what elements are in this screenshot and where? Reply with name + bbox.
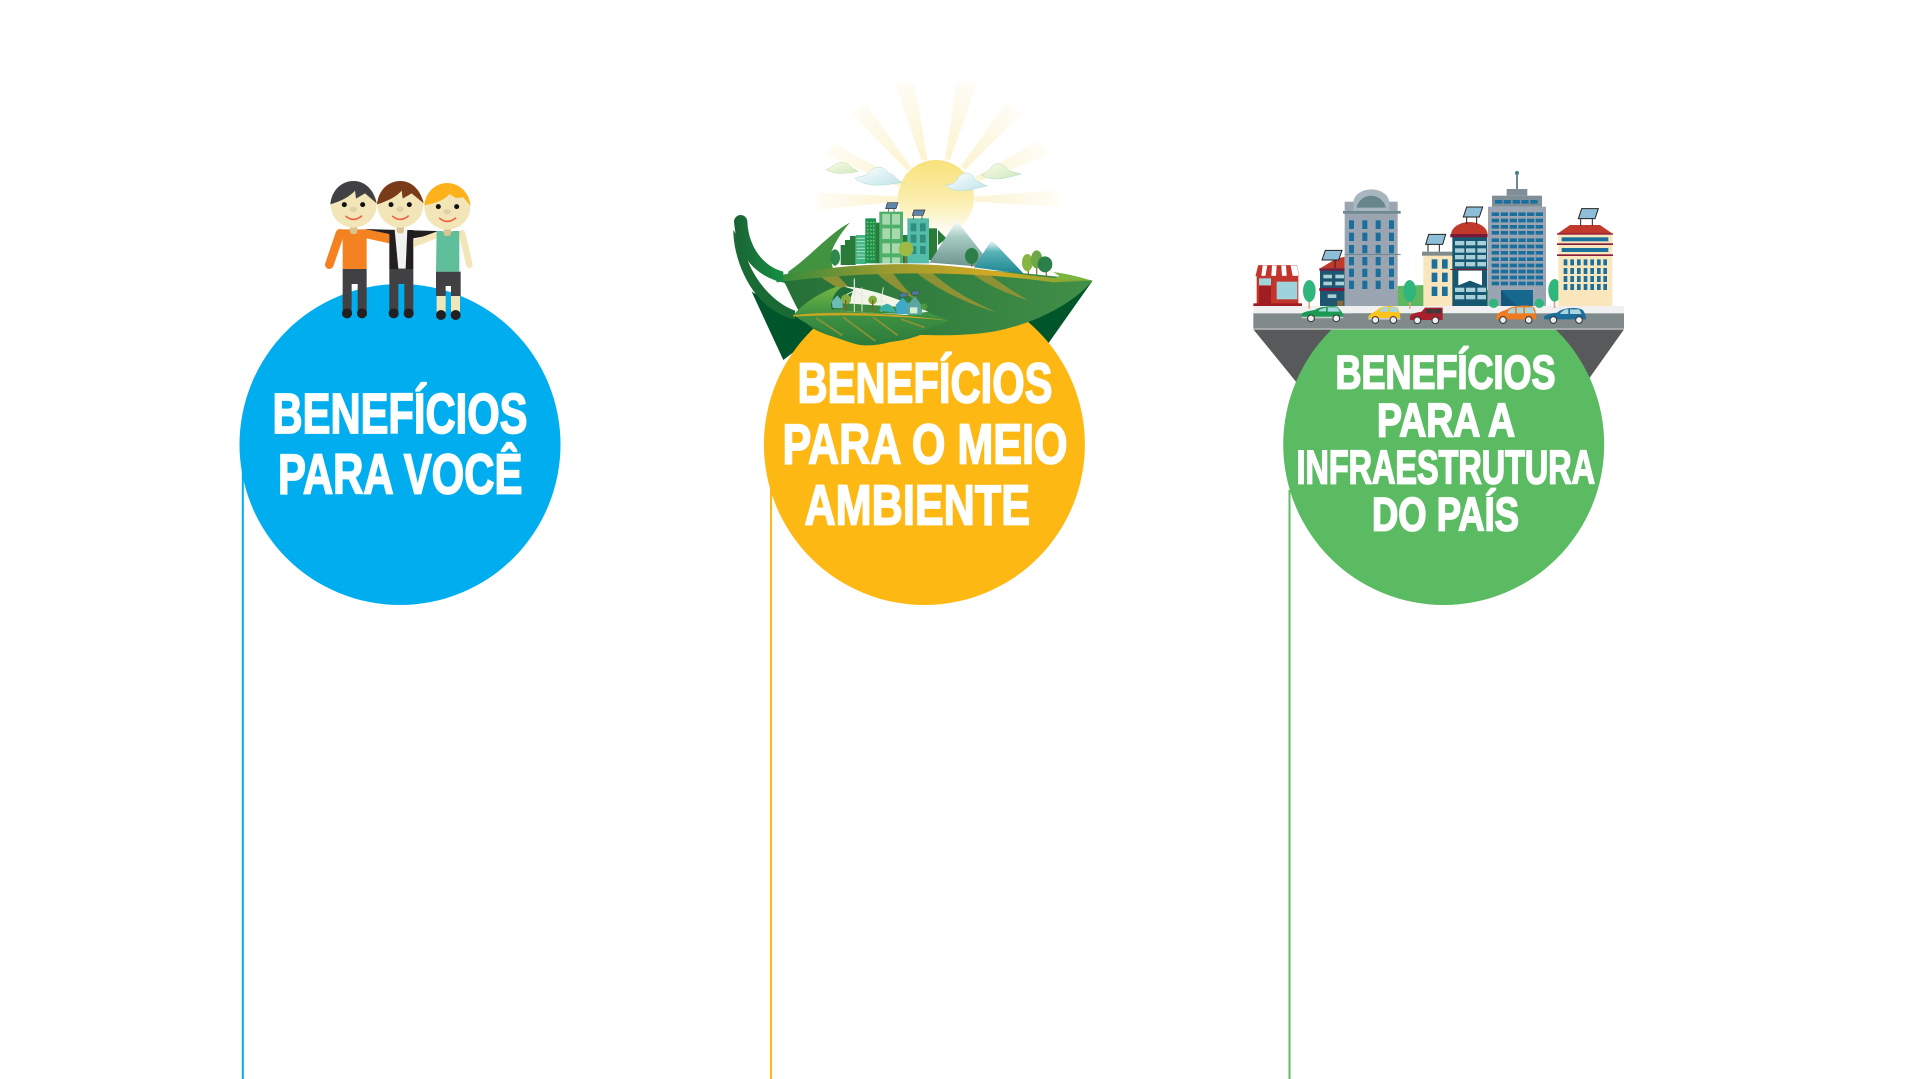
clouds (826, 163, 1021, 191)
green city skyline (841, 203, 947, 265)
heading: benefícios para o meio ambiente: AMBIENTE (804, 474, 1030, 537)
tall grey office tower (1488, 171, 1546, 308)
friend 1 orange (329, 181, 389, 318)
leaf gold rim (775, 264, 1093, 282)
dark platform under road (1253, 329, 1624, 387)
red car (1410, 308, 1443, 324)
sun rays (817, 82, 1060, 210)
friend 2 suit (377, 181, 424, 318)
blue vertical line (242, 470, 244, 1079)
heading: benefícios para o meio ambiente: PARA O MEIO (782, 413, 1068, 476)
black arm behind (365, 229, 437, 238)
small leaf gold rim and veins (793, 313, 949, 341)
small teal building (1319, 250, 1345, 306)
trees (830, 242, 1052, 277)
icon: three friends (329, 181, 471, 320)
road and sidewalk (1253, 306, 1624, 330)
dark leaf back (752, 281, 1093, 360)
lower stem (733, 230, 795, 319)
green circle (1283, 284, 1604, 605)
orange vertical line (770, 485, 772, 1079)
mountains (929, 221, 985, 267)
small leaf (793, 287, 949, 345)
teal domed tower (1450, 207, 1488, 306)
heading: benefícios para você (272, 382, 528, 506)
trees (1303, 279, 1561, 309)
friend 3 green (413, 183, 471, 320)
heading: benefícios para a infraestrutura do país (1296, 346, 1595, 541)
shop (1253, 265, 1302, 306)
heading: benefícios para a infraestrutura do país: DO PAÍS (1372, 488, 1519, 541)
panel: benefícios para você (240, 181, 560, 1079)
yellow car (1368, 306, 1400, 323)
blue car (1544, 308, 1586, 323)
sun rays and sun (817, 82, 1060, 236)
small leaf window with village (831, 278, 928, 315)
right cream building (1557, 209, 1613, 306)
heading: benefícios para a infraestrutura do país: INFRAESTRUTURA (1296, 440, 1595, 493)
upper stem (734, 215, 783, 283)
heading: benefícios para o meio ambiente: BENEFÍCIOS (798, 351, 1052, 414)
upper leaf tip (787, 223, 850, 283)
leaf veins (820, 270, 1028, 312)
heading: benefícios para você: BENEFÍCIOS (272, 382, 528, 445)
orange circle (764, 284, 1085, 605)
sun (898, 160, 974, 236)
heading: benefícios para a infraestrutura do país: PARA A (1377, 393, 1515, 446)
icon: leaf with green city (733, 203, 1093, 345)
heading: benefícios para a infraestrutura do país: BENEFÍCIOS (1336, 346, 1556, 399)
main leaf body (773, 266, 1093, 343)
icon: city street (1253, 171, 1624, 330)
domed grey tower (1343, 189, 1401, 306)
green vertical line (1288, 490, 1290, 1079)
heading: benefícios para você: PARA VOCÊ (278, 442, 522, 506)
cars (1302, 305, 1586, 324)
heading: benefícios para o meio ambiente (782, 351, 1068, 537)
orange car (1496, 305, 1536, 323)
cream building (1422, 234, 1453, 306)
blue circle (240, 284, 560, 605)
panel: benefícios para a infraestrutura do país (1253, 171, 1624, 1079)
panel: benefícios para o meio ambiente (733, 82, 1093, 1079)
green car (1302, 306, 1343, 322)
